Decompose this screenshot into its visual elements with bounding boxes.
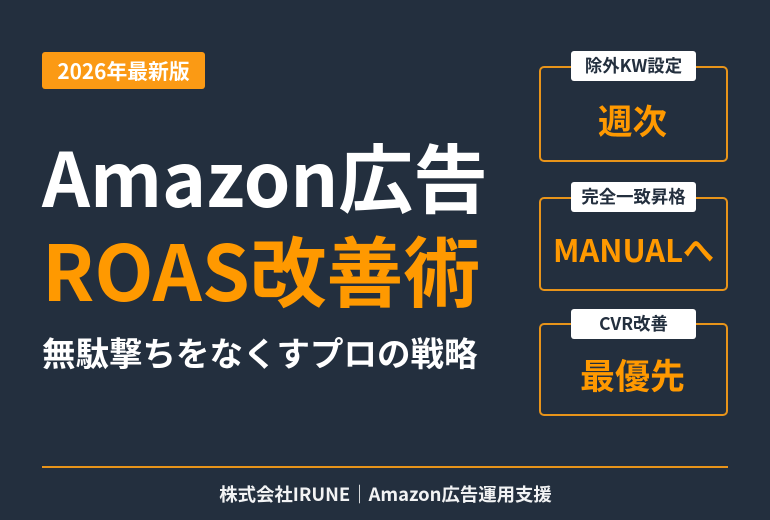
label: negative KW setting (571, 51, 696, 81)
title: Amazon advertising: Amazon広告 (42, 120, 488, 229)
panel frame (539, 323, 728, 416)
footer text: 株式会社IRUNE｜Amazon広告運用支援 (219, 481, 552, 507)
badge: 2026 edition (42, 52, 205, 89)
title: ROAS improvement: ROAS改善術 (42, 213, 480, 324)
panel frame (539, 197, 728, 291)
panel: CVR improvement (539, 309, 728, 416)
value: weekly: 週次 (598, 94, 667, 144)
panel: negative keywords (539, 51, 728, 162)
subtitle: 無駄撃ちをなくすプロの戦略 (42, 327, 478, 376)
value: top priority: 最優先 (580, 349, 685, 400)
badge: 2026 edition: 2026年最新版 (57, 55, 190, 85)
label: negative KW setting: 除外KW設定 (585, 53, 682, 78)
panel: exact match bid (539, 182, 728, 291)
label: CVR improvement (571, 309, 696, 339)
value: to manual: MANUALへ (553, 226, 714, 271)
panel frame (539, 66, 728, 162)
label: CVR improvement: CVR改善 (599, 311, 668, 336)
label: exact match promotion (571, 182, 696, 212)
label: exact match promotion: 完全一致昇格 (581, 184, 686, 209)
footer rule (42, 466, 728, 468)
